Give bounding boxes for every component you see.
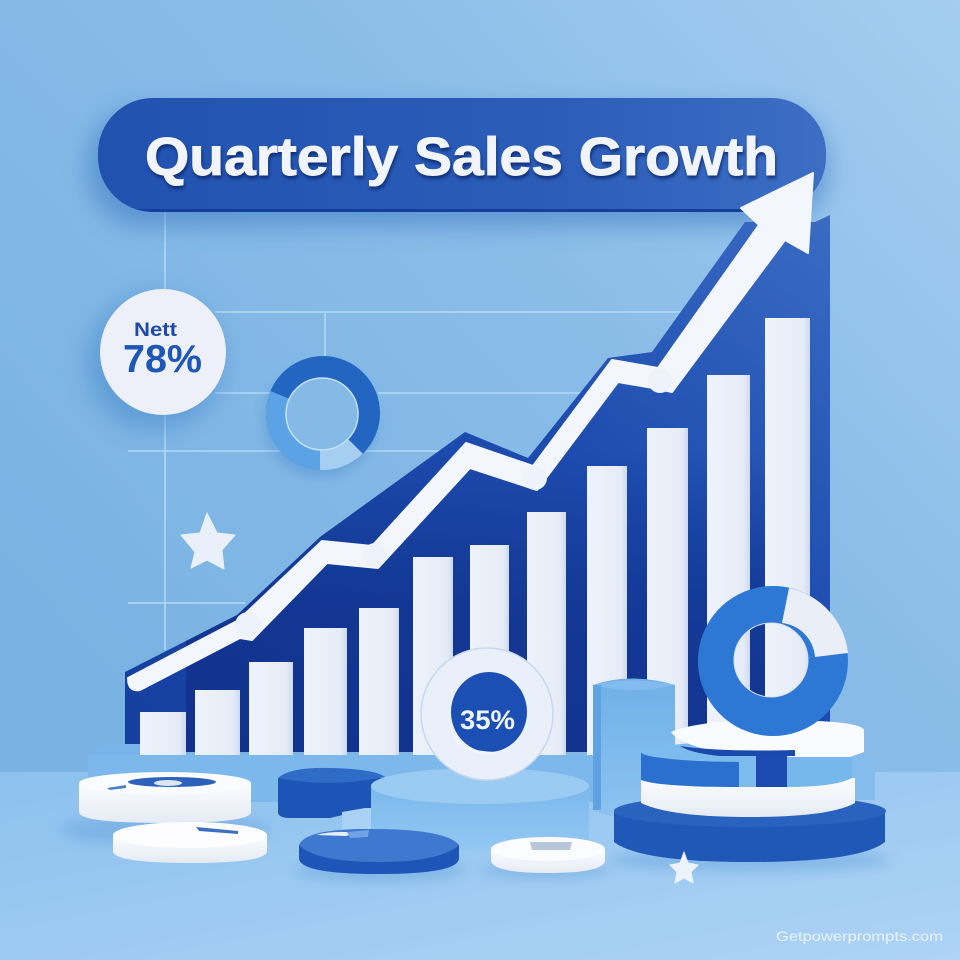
segmented tier: [641, 752, 739, 787]
watermark: Getpowerprompts.com: [776, 929, 943, 944]
top white tier: [671, 720, 864, 757]
large donut chart: [698, 586, 848, 736]
dark blue prism: [278, 768, 385, 818]
dark blue disc: [299, 829, 459, 874]
small white disc: [491, 837, 605, 873]
base: [614, 812, 885, 862]
light blue cylinder: [593, 678, 675, 816]
callout: net percentage: 78%: [123, 338, 202, 381]
grid lines: [128, 212, 700, 650]
floor shadows: [60, 814, 890, 882]
percentage ring: [421, 648, 553, 780]
title text: Quarterly Sales Growth: [145, 127, 778, 187]
growth arrow: [128, 173, 813, 690]
small donut chart: [264, 356, 380, 477]
platform: [88, 744, 875, 802]
icon: star: [181, 513, 235, 569]
ring label: 35%: [460, 705, 515, 735]
stacked podium: [614, 720, 886, 862]
callout: net percentage: [87, 289, 226, 430]
icon: small star: [670, 852, 698, 883]
light blue podium: [371, 768, 589, 850]
title banner: [88, 98, 828, 226]
white discs: [79, 772, 267, 863]
bar chart: [140, 318, 810, 755]
area chart backdrop: [125, 215, 830, 752]
dark stripes between bars: [186, 497, 765, 752]
light blue tile: [342, 808, 375, 830]
white tier: [641, 778, 855, 817]
floor: [0, 772, 960, 960]
callout: net percentage: Nett: [134, 320, 178, 341]
